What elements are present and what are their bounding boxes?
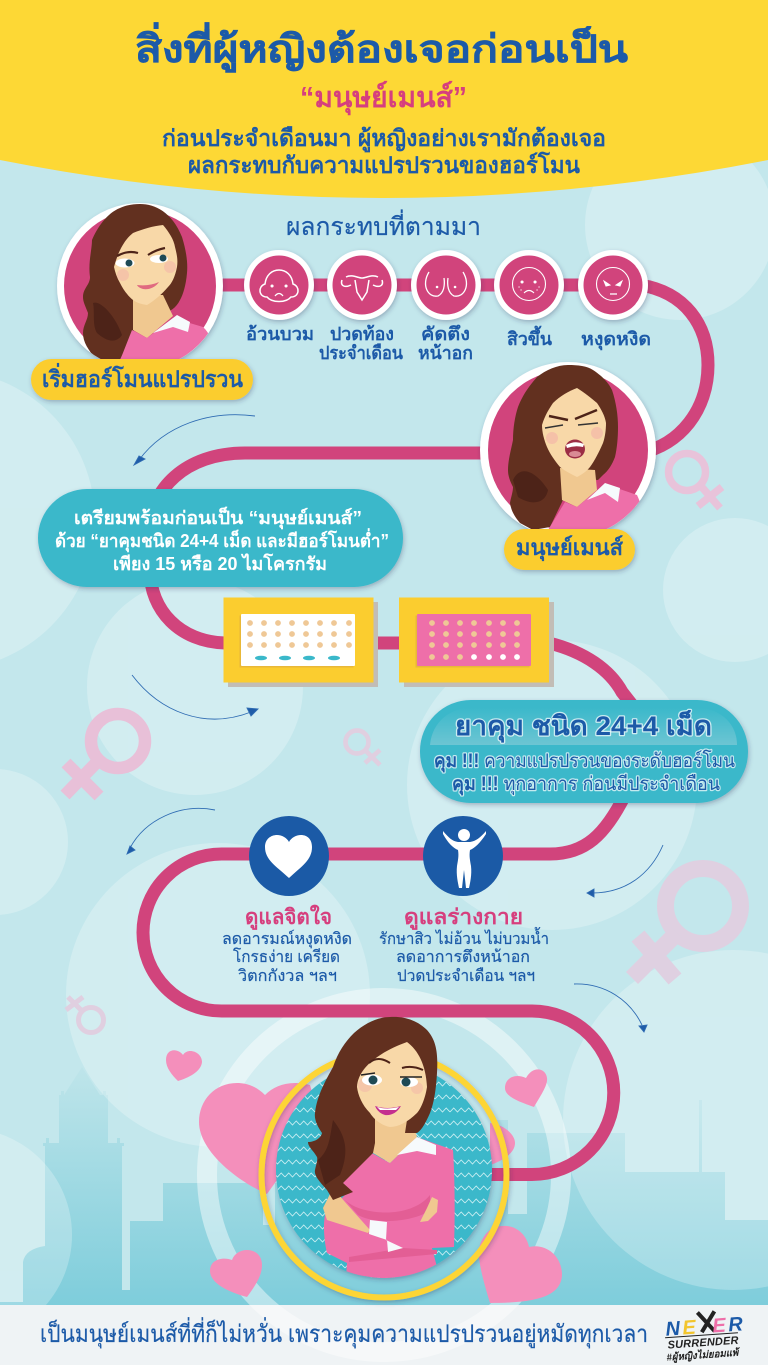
- venus symbol large mid left: [65, 714, 145, 796]
- yellow pill: menstrual human: [504, 529, 635, 570]
- mind line two: โกรธง่าย เครียด: [233, 947, 340, 966]
- icon: uterus: [327, 250, 397, 320]
- mind line three: วิตกกังวล ฯลฯ: [238, 968, 337, 985]
- decorative ring behind portrait: [207, 998, 561, 1352]
- icon: acne face: [494, 250, 564, 320]
- heading: body: ดูแลร่างกาย: [404, 906, 523, 931]
- logo: never surrender: SURRENDER: [667, 1335, 739, 1352]
- heading: mind: ดูแลจิตใจ: [245, 904, 332, 931]
- teal callout: prepare: [38, 489, 403, 587]
- logo: never surrender: E: [682, 1317, 697, 1340]
- label: breast line one: คัดตึง: [421, 324, 470, 344]
- arrow four: [587, 845, 663, 897]
- skyline silhouette: [0, 1067, 768, 1305]
- label: cramps line one: ปวดท้อง: [330, 324, 394, 344]
- teal callout: 24+4 pill: [420, 700, 748, 803]
- title: สิ่งที่ผู้หญิงต้องเจอก่อนเป็น: [135, 22, 628, 73]
- venus symbol small mid: [346, 730, 380, 765]
- venus symbol small left: [66, 997, 104, 1032]
- icon: breasts: [411, 250, 481, 320]
- label: swelling: อ้วนบวม: [246, 324, 314, 344]
- logo: never surrender: [663, 1309, 746, 1364]
- icon: heart badge: [249, 816, 329, 896]
- hearts behind portrait: [166, 1050, 562, 1303]
- callout line one: คุม !!! ความแปรปรวนของระดับฮอร์โมน: [434, 749, 735, 773]
- venus symbol large right: [632, 868, 740, 979]
- portrait: angry woman: [480, 362, 656, 545]
- callout line two: ด้วย “ยาคุมชนิด 24+4 เม็ด และมีฮอร์โมนต่ำ”: [55, 528, 389, 553]
- callout line three: เพียง 15 หรือ 20 ไมโครกรัม: [113, 553, 327, 574]
- intro line one: ก่อนประจำเดือนมา ผู้หญิงอย่างเรามักต้องเจอ: [162, 125, 606, 153]
- portrait: woman start: [57, 203, 223, 372]
- logo: never surrender: #ผู้หญิงไม่ยอมแพ้: [666, 1346, 742, 1364]
- column: body care: [379, 906, 549, 985]
- callout line one: เตรียมพร้อมก่อนเป็น “มนุษย์เมนส์”: [74, 506, 362, 530]
- header banner: [0, 0, 768, 198]
- heading: effects: ผลกระทบที่ตามมา: [286, 209, 481, 241]
- logo: never surrender: N: [665, 1318, 681, 1341]
- icon: puffy face: [244, 250, 314, 320]
- label: moody: หงุดหงิด: [581, 329, 651, 351]
- callout title: ยาคุม ชนิด 24+4 เม็ด: [455, 708, 712, 743]
- footer message: เป็นมนุษย์เมนส์ที่ที่ก็ไม่หวั่น เพราะคุมความแปรปรวนอยู่หมัดทุกเวลา: [40, 1317, 648, 1349]
- icon: angry face: [578, 250, 648, 320]
- logo: never surrender: E: [712, 1315, 727, 1337]
- intro line two: ผลกระทบกับความแปรปรวนของฮอร์โมน: [188, 151, 580, 178]
- pill pack: white 24+4: [224, 598, 378, 687]
- yellow pill: hormone start: เริ่มฮอร์โมนแปรปรวน: [42, 362, 243, 392]
- labels for effects: [246, 324, 651, 363]
- yellow pill: menstrual human: มนุษย์เมนส์: [516, 535, 624, 562]
- arrow two: [132, 675, 258, 719]
- pill pack: pink: [399, 598, 554, 687]
- footer background: [0, 1305, 768, 1365]
- arrow one: [134, 415, 255, 465]
- venus symbol right top: [668, 454, 722, 508]
- arrow three: [127, 808, 215, 854]
- column: mind care: [222, 904, 352, 985]
- subtitle pink: “มนุษย์เมนส์”: [300, 80, 467, 115]
- body line three: ปวดประจำเดือน ฯลฯ: [397, 967, 535, 985]
- label: breast line two: หน้าอก: [418, 343, 473, 363]
- icon: body badge: [423, 816, 503, 896]
- body line two: ลดอาการตึงหน้าอก: [396, 948, 530, 966]
- label: cramps line two: ประจำเดือน: [319, 343, 404, 363]
- arrow five: [574, 984, 647, 1032]
- timeline path: [143, 285, 708, 1174]
- yellow pill: hormone start: [31, 359, 253, 400]
- body line one: รักษาสิว ไม่อ้วน ไม่บวมน้ำ: [379, 927, 549, 948]
- logo: never surrender: R: [728, 1313, 744, 1336]
- callout line two: คุม !!! ทุกอาการ ก่อนมีประจำเดือน: [452, 773, 720, 796]
- mind line one: ลดอารมณ์หงุดหงิด: [222, 929, 352, 949]
- portrait: confident woman: [262, 1017, 506, 1298]
- label: acne: สิวขึ้น: [507, 325, 553, 349]
